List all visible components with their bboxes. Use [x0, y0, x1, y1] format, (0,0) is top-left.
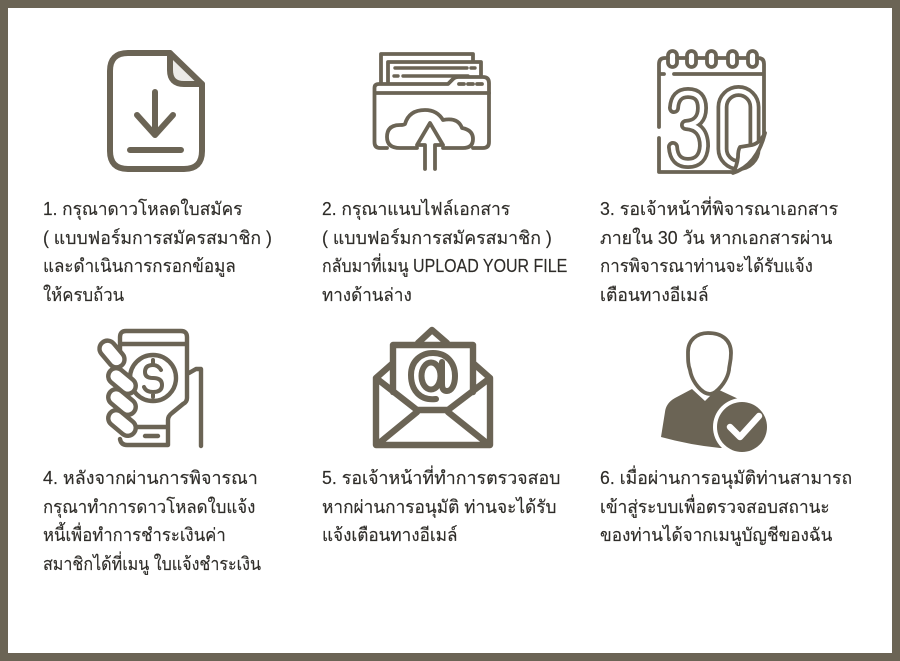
text: step 2: ทางด้านล่าง: [322, 285, 412, 305]
text: step 6: [600, 465, 852, 546]
text: step 5: 5. รอเจ้าหน้าที่ทำการตรวจสอบ: [322, 468, 560, 488]
text: step 4: กรุณาทำการดาวโหลดใบแจ้ง: [43, 497, 255, 517]
text: step 5: หากผ่านการอนุมัติ ท่านจะได้รับ: [322, 497, 556, 517]
text: step 3: ภายใน 30 วัน หากเอกสารผ่าน: [600, 228, 832, 248]
icon: folder with cloud upload: [372, 52, 491, 171]
icon: hand holding phone with dollar: [97, 328, 204, 448]
text: step 3: 3. รอเจ้าหน้าที่พิจารณาเอกสาร: [600, 199, 838, 219]
text: step 4: [43, 468, 261, 575]
icon: open envelope with at sign: [372, 326, 494, 448]
text: step 6: 6. เมื่อผ่านการอนุมัติท่านสามารถ: [600, 468, 852, 488]
text: step 5: [322, 465, 560, 545]
text: step 3: การพิจารณาท่านจะได้รับแจ้ง: [600, 256, 813, 276]
text: step 2: กลับมาที่เมนู UPLOAD YOUR FILE: [322, 256, 567, 276]
text: step 1: [43, 198, 272, 305]
text: step 2: 2. กรุณาแนบไฟล์เอกสาร: [322, 199, 510, 219]
text: step 2: [322, 198, 567, 305]
text: step 1: และดำเนินการกรอกข้อมูล: [43, 256, 236, 276]
text: step 3: [600, 196, 838, 305]
text: step 5: แจ้งเตือนทางอีเมล์: [322, 525, 458, 545]
text: step 3: เตือนทางอีเมล์: [600, 285, 709, 305]
text: step 6: เข้าสู่ระบบเพื่อตรวจสอบสถานะ: [600, 497, 830, 517]
icon: person with check mark: [661, 331, 767, 452]
text: step 6: ของท่านได้จากเมนูบัญชีของฉัน: [600, 525, 832, 545]
icon: calendar 30 days: [657, 49, 767, 175]
text: step 1: 1. กรุณาดาวโหลดใบสมัคร: [43, 199, 242, 219]
text: step 4: หนี้เพื่อทำการชำระเงินค่า: [43, 525, 226, 545]
text: step 2: ( แบบฟอร์มการสมัครสมาชิก ): [322, 228, 552, 248]
icon: document download: [107, 50, 205, 172]
text: step 4: สมาชิกได้ที่เมนู ใบแจ้งชำระเงิน: [43, 554, 261, 574]
text: step 1: ( แบบฟอร์มการสมัครสมาชิก ): [43, 228, 272, 248]
text: step 1: ให้ครบถ้วน: [43, 285, 124, 305]
text: step 4: 4. หลังจากผ่านการพิจารณา: [43, 468, 258, 488]
